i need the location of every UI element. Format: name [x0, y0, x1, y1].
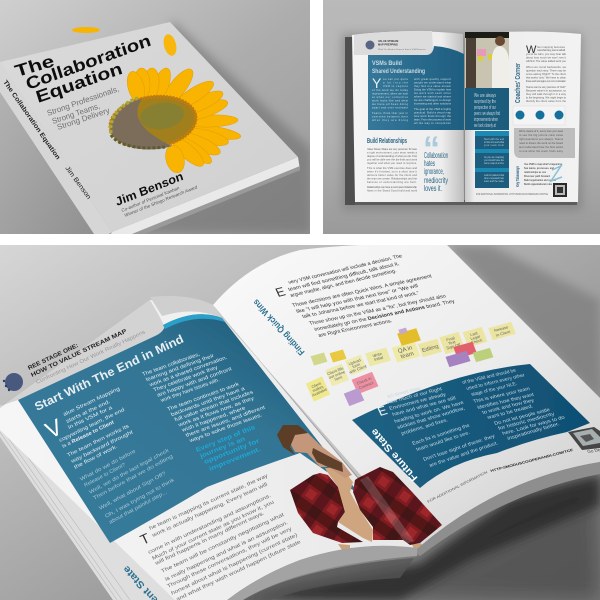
sticky notes: Initial	[373, 355, 384, 362]
current state text: work is actually happening. Every team will	[151, 482, 269, 539]
coaches corner text: these and reimagine our communication	[526, 79, 566, 83]
key takeaways: Build organization and context	[524, 179, 556, 182]
spine text: Jim Benson	[63, 165, 92, 201]
blue panel text: increasing and often solutions	[414, 102, 452, 106]
panel: perspective spread mockup	[0, 244, 600, 600]
step diagram	[513, 106, 565, 125]
header tab	[0, 300, 164, 408]
current state text: he team is mapping its current state, the way	[148, 473, 270, 532]
blue panel text: Teams think that just in	[372, 111, 408, 115]
hair	[277, 425, 308, 455]
header tab	[354, 31, 433, 55]
left column text: starts at the end.	[65, 399, 111, 425]
sticky notes: form	[334, 374, 344, 382]
right column text: work as a shared conversation.	[149, 355, 228, 388]
right column text: there are issues, and different	[185, 405, 267, 439]
beard	[312, 448, 343, 472]
subtitle: Strong Delivery	[56, 106, 111, 132]
blue panel text: ou can put quite	[383, 77, 408, 81]
left column text: way backward throught	[70, 429, 135, 465]
title: Collaboration	[23, 31, 153, 94]
pull quote	[424, 136, 448, 191]
right page: We are always	[474, 93, 496, 99]
footer url: FOR ADDITIONAL INFORMATION: HTTP://MODUSCOOPERANDI.COM/TCE	[476, 192, 548, 196]
sticky notes: QA in	[397, 345, 413, 355]
sticky notes: with Client	[348, 363, 368, 375]
key takeaways: relationships as one	[524, 171, 547, 174]
book spine and page edge	[0, 62, 112, 240]
left page: delivers better value for the client and	[367, 173, 418, 177]
blue step panels: Look for patterns that	[484, 174, 504, 177]
bent knee skin	[338, 544, 422, 550]
right column text: They celebrate work they	[152, 365, 219, 393]
panel: perspective spread mockup: Well, what about Sign Off?	[98, 471, 167, 512]
future state text: Environment we already	[388, 392, 448, 412]
sticky notes: Contract	[358, 380, 375, 390]
blue panel text: we are challenged, to design	[414, 98, 452, 102]
left page: balance of understanding are built.	[367, 180, 417, 184]
blue panel text: what they are doing	[372, 118, 408, 122]
coaches corner text: you to be calm, you may hear talk	[526, 52, 567, 56]
future state text: for historic mediocrity	[497, 411, 556, 432]
blue panel	[368, 46, 464, 130]
panel: perspective spread mockup: Release to Client?	[83, 462, 127, 489]
logo	[366, 40, 374, 50]
header text: VALUE STREAM	[378, 39, 398, 43]
subtitle	[47, 88, 119, 130]
future state text: heading to work on. We have	[393, 400, 465, 425]
callout: every step	[195, 424, 262, 473]
photo caption panel	[465, 88, 509, 130]
blue panel text: all the way to completion	[414, 121, 452, 125]
future state text: here. Look for ways to do	[501, 415, 566, 437]
current state text: The team will be constantly negotiating what	[160, 512, 286, 575]
blue panel text: how work flows through the	[414, 114, 452, 118]
blue panel text	[372, 75, 452, 125]
blue step panels: when repeated help	[484, 177, 505, 180]
header text	[378, 40, 426, 50]
future state text: inspirationally better.	[506, 421, 561, 442]
blue panel text: people we understand what	[414, 80, 451, 84]
left page: flows in the Stand Good build and work	[367, 188, 418, 192]
left column text: in this VSM for a	[67, 405, 113, 431]
right page intro text: argue maybe, align, and then decide something.	[289, 268, 398, 299]
blue step panels: to find who and what	[484, 141, 504, 144]
sticky notes: Client	[311, 380, 323, 389]
drop cap E: E	[273, 284, 288, 300]
key takeaways: Use VSM to map what's happening	[524, 163, 563, 166]
right column text: learning and defining their	[145, 353, 216, 383]
right column text: ways to solve those issues.	[189, 412, 263, 444]
sidebar heading: finding quick wins: Finding Quick Wins	[251, 297, 306, 357]
right page intro text: very VSM conversation will include a decision. The	[287, 253, 403, 286]
seed head	[109, 96, 197, 145]
panel: perspective spread mockup: Well, we do the last legal check	[88, 447, 170, 496]
current state text	[147, 473, 302, 600]
gray note panel: to use what the team finds easy	[519, 149, 564, 153]
right page intro text: talk to Johanna before we start that kind of work."	[301, 291, 421, 320]
callout: every step: Every step of this	[195, 424, 257, 454]
blue panel: future state	[352, 364, 590, 488]
spine text: The Collaboration Equation	[1, 79, 61, 161]
coaches corner text: overwhelming, teams will tell	[537, 48, 565, 52]
current state drop cap: T	[138, 530, 152, 548]
right column text: work as it flows now, as they	[177, 396, 256, 428]
panel: perspective spread mockup: about that painful step...	[108, 490, 168, 526]
heading: start with the end in mind: Start With The End in Mind	[32, 332, 186, 414]
callout: every step: improvement.	[208, 446, 262, 473]
spine text	[1, 79, 92, 201]
man illustration	[277, 425, 442, 550]
logo globe	[3, 373, 23, 391]
coaches corner text: will find. The value added work you	[526, 59, 566, 63]
drop cap V: V	[41, 413, 67, 444]
title	[14, 38, 151, 102]
key takeaways: Key Takeaways	[515, 166, 520, 187]
coaches corner text: about how much we won't see it	[526, 56, 566, 60]
subtitle: Strong Teams,	[51, 101, 101, 126]
future state text: Each fix is something the	[411, 423, 471, 447]
heading: Shared Understanding	[372, 69, 425, 75]
future state text	[386, 368, 566, 469]
heading	[372, 61, 425, 75]
right page intro text: Those decisions are often Quick Wins. A simple agreement	[291, 273, 434, 309]
left page: a right environment, your team needs a	[367, 150, 418, 154]
blue panel text: a lot into the	[383, 80, 408, 84]
sticky notes: team	[400, 351, 415, 360]
blue step panels: your team must	[484, 144, 504, 147]
left column text: The team then works its	[66, 423, 130, 459]
current state text: Much of your current state as you know it, you	[151, 499, 275, 562]
blue step panels: team and the value	[484, 180, 505, 183]
key takeaways	[515, 163, 563, 187]
footer url: HTTP://MODUSCOOPERANDI.COM/TCE	[490, 448, 575, 473]
blue panel text: apart and over estimate	[372, 106, 408, 110]
blue step panels	[475, 131, 509, 188]
right column text: full value stream that includes	[174, 389, 255, 423]
pull quote: mediocrity	[424, 176, 448, 185]
current state text: come in with understanding and assumptions.	[147, 493, 272, 556]
blue panel text: at what our collective	[372, 95, 408, 99]
blue step panels: Start with the end	[484, 138, 505, 141]
footer url: FOR ADDITIONAL INFORMATION	[427, 470, 489, 504]
future state text: Don't lose sight of these: they	[422, 433, 497, 463]
right column text: The team continues to work	[166, 381, 241, 413]
future state text: stage of the your NLE.	[470, 381, 518, 398]
heading: VSMs Build	[372, 61, 402, 67]
pull quote: Collaboration	[424, 151, 448, 160]
left page: the team we create. Relationships and the	[367, 176, 418, 180]
key takeaways: See teams, processes, and	[524, 167, 555, 170]
blue panel text: VSM to capture	[383, 84, 408, 88]
face	[287, 432, 352, 478]
right page	[465, 32, 581, 202]
left page: together and what you need to improve.	[367, 161, 417, 165]
page stack left	[0, 405, 240, 600]
blue panel	[18, 314, 360, 543]
future state text: team would like to see.	[415, 430, 471, 453]
left page: This is what the VSM exercise does and	[367, 166, 418, 170]
sticky notes: Check	[470, 337, 483, 345]
panel: perspective spread mockup: Then before that we do editing	[92, 454, 174, 502]
coaches corner heading: Coaches' Corner	[515, 63, 522, 103]
coaches corner text: identify the client value from the	[526, 99, 566, 103]
panel: perspective spread mockup: What do we do before	[79, 448, 137, 483]
right column text: backwards until they have a	[170, 386, 246, 418]
gray note panel: to see the big picture clear value	[519, 133, 564, 137]
blue panel text: they find in a value stream	[414, 84, 452, 88]
page header: HOW TO VALUE STREAM MAP	[30, 329, 128, 379]
subtitle: Strong Professionals,	[46, 84, 120, 118]
pull quote: “	[423, 130, 440, 168]
page header: Confronting How Our Work Really Happens	[35, 329, 147, 386]
coaches corner text: some asking 'Right?' To the client	[526, 72, 566, 76]
left page: Value Stream Maps are very personal. To have	[367, 147, 418, 151]
blue panel text: The goal of the VSM is highly	[414, 107, 452, 111]
blue panel text: improvement, when we look	[372, 92, 409, 96]
future state text: problems, and fixes.	[400, 417, 449, 437]
coaches corner text: W	[526, 44, 537, 56]
current state text: Through these conversations, they will be very	[166, 526, 293, 590]
sticky notes: Client fills	[326, 366, 344, 376]
right page: surprised by the	[474, 99, 496, 105]
right page	[213, 244, 600, 548]
book shadow	[130, 20, 312, 234]
qr code	[553, 183, 567, 197]
right page intro text: Those show up on the VSM as a "fix", but they should also	[308, 294, 447, 327]
title: The	[12, 52, 57, 81]
build relationships section: Build Relationships	[367, 138, 407, 145]
spine shade	[213, 305, 425, 548]
coaches corner text	[526, 44, 567, 103]
blue step panels: same map at a time	[484, 162, 505, 165]
pull quote: hates	[424, 159, 435, 168]
current state text: will find happens in many different ways.	[154, 510, 265, 567]
future state text: ach element shows	[386, 386, 422, 400]
future state text: to work and how they	[481, 398, 536, 416]
right column text: wish it happened, where	[181, 405, 247, 434]
future state text: stickies that show workflow,	[396, 406, 466, 431]
left page: you will be able see the dis-links and work	[367, 158, 418, 162]
gray note panel: We're aware of it, every time you need	[519, 129, 564, 133]
left page	[0, 300, 420, 600]
sticky notes: makes	[311, 384, 324, 393]
page curl highlight	[150, 296, 222, 318]
coaches corner text: to the beginning. We might begin to	[526, 96, 566, 100]
book cover	[0, 22, 298, 232]
panel: book cover mockup	[0, 0, 312, 240]
coaches corner text: Teams can be very precious of "truth"	[526, 85, 566, 89]
qr code	[568, 427, 600, 450]
left column text: is a Release to Client	[61, 419, 115, 450]
future state drop cap: E	[375, 403, 390, 419]
footer url	[427, 448, 575, 504]
future state text: used to inform every other	[465, 373, 526, 392]
key takeaways: Discover path forward	[524, 175, 551, 178]
book shadow	[272, 474, 600, 600]
sticky notes: Available	[311, 387, 328, 398]
right page intro text: team will find something difficult, talk about it,	[287, 261, 400, 293]
coaches corner text: question each step. There may be	[526, 68, 566, 72]
coaches corner text: hen mapping becomes	[537, 45, 566, 49]
sticky notes: Legal	[470, 334, 481, 341]
sticky notes: Editing	[421, 344, 439, 354]
sticky notes: form	[351, 361, 362, 369]
header text: MAP PREPPING	[378, 42, 398, 46]
sticky notes: Check in	[356, 376, 372, 386]
coaches corner text: When we round backwards, we	[526, 65, 566, 69]
future state text: This is where your team	[472, 386, 531, 405]
right page intro text: immediately go on the Decisions and Actions board. They	[313, 299, 456, 333]
future state text: Do not let people settle	[493, 407, 551, 427]
page header: REE STAGE ONE:	[27, 343, 80, 372]
book back edge	[345, 37, 355, 205]
coaches corner text: that works 'only'. We have to clean	[526, 76, 566, 80]
right page intro text: are Right Environment actions.	[317, 318, 393, 339]
future state text: how much of our Right	[386, 386, 444, 406]
blue panel text: team. From the process of work	[414, 118, 452, 122]
blue panel text: we have all been doing	[372, 102, 408, 106]
sticky notes: Last	[469, 330, 479, 337]
sticky notes: to Client	[495, 329, 512, 338]
coaches corner text: they will walk through it in a way	[526, 92, 567, 96]
heading: future state: Future State	[369, 426, 420, 483]
book shadow	[342, 34, 582, 210]
gray note panel: right questions you always. Teams	[519, 137, 564, 141]
callout: every step: opportunity for	[203, 437, 261, 466]
left column text	[58, 386, 135, 471]
panel: perspective spread mockup: Oh, I was trying not to think	[104, 477, 176, 520]
blue panel text: of the work we do today	[372, 88, 409, 92]
sticky notes: Sign Off	[445, 342, 462, 351]
page block edge	[227, 462, 600, 600]
left page	[352, 31, 464, 202]
blue step panels: you should have the	[484, 159, 505, 162]
sticky notes: out online	[328, 369, 347, 380]
left column text: copywriting team, the end	[58, 407, 126, 444]
callout: every step: journey is an	[198, 436, 247, 460]
blue panel text: practical. Build a visual map	[414, 110, 452, 114]
right page: peers: we always find	[474, 111, 500, 117]
sticky notes: Text	[447, 339, 457, 346]
sticky notes: Final	[445, 335, 456, 342]
title: Equation	[34, 59, 125, 107]
blue panel text: overview between their	[372, 114, 408, 118]
blue panel text: with great quality support	[414, 77, 451, 81]
right page intro text	[287, 253, 456, 339]
right page: we look closely at	[474, 123, 496, 129]
sticky notes: Upload	[348, 357, 361, 366]
gray note panel: and understand how the flow works	[519, 145, 564, 149]
right column text	[141, 352, 267, 444]
header text: What You Need to Know to Start a VSM Exercise	[378, 48, 426, 51]
future state text: want to be treated.	[486, 404, 534, 421]
gray note panel	[514, 128, 575, 158]
right page: perspective of our	[474, 105, 496, 111]
sticky notes: Write	[372, 351, 383, 358]
blue step panels: As you are mapping	[484, 156, 505, 159]
shirt	[290, 473, 363, 543]
left column text: alue Stream Mapping	[62, 386, 121, 418]
pull quote: ignorance,	[424, 167, 444, 176]
right column text: are happy with and confront	[156, 366, 234, 399]
right page: improvements when	[474, 117, 498, 123]
key takeaways: Build organizational roles	[524, 183, 553, 186]
left page: when it's finished, so in a short time it	[367, 170, 417, 174]
author credits: Co-author of Personal Kanban	[121, 185, 180, 213]
left page: degree of understanding of what you do. First	[367, 154, 417, 158]
pull quote: loves it.	[424, 184, 442, 193]
sticky notes: Release	[493, 324, 510, 333]
future state text: have and what we are still	[391, 395, 457, 418]
future state text: identifies how they want	[476, 392, 536, 411]
arm and hand	[325, 468, 373, 542]
gray note panel: need to dream the work on the board	[519, 141, 564, 145]
left page: Relationships can have a real impact. Relationship	[367, 185, 418, 189]
sticky notes	[306, 322, 516, 406]
panel: open spread mockup	[323, 0, 600, 234]
right column text: The team collaborates,	[141, 352, 201, 378]
current state text: honest about what is happening (current state)	[170, 532, 299, 597]
sunflower	[72, 27, 242, 175]
blue panel text: Doing the VSM to explain how	[414, 88, 451, 92]
blue panel text: we work with each other	[414, 91, 451, 95]
blue panel text: Y	[372, 75, 382, 91]
blue panel text: where we started and where	[414, 94, 452, 98]
shirt highlight	[360, 476, 414, 544]
future state text: of the VSM and should be	[461, 368, 517, 386]
photo	[465, 32, 509, 88]
current state text: is really happening and what is an assumption.	[164, 520, 289, 583]
right page intro text: like "I will help you with that next time" or "We will	[295, 283, 419, 315]
coaches corner text: Because value is in acceptance, so	[526, 88, 566, 92]
right column text: work they have issues with.	[160, 377, 221, 404]
author: Jim Benson	[114, 169, 185, 209]
left column text: the flow of work.	[73, 444, 119, 471]
falling petals	[72, 27, 100, 33]
blue panel text: work looks like and what	[372, 98, 408, 102]
author credits: Winner of the Shingo Research Award	[124, 184, 198, 218]
future state text: are the value and the product.	[428, 440, 499, 469]
